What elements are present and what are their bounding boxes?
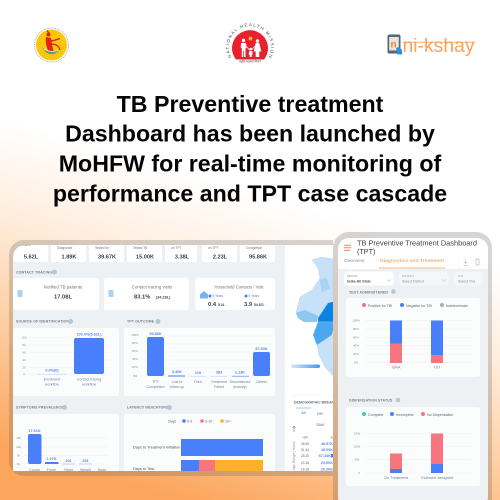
phone header: TB Preventive Treatment Dashboard [357, 238, 477, 248]
summary cards row: Enrolled [19, 243, 31, 247]
card: contact tracing visits: (34.28L) [156, 296, 171, 300]
panel: dispensation status chart: On Treatment [384, 475, 409, 480]
heading: source of identification: SOURCE OF IDENTIFICATION [16, 320, 70, 324]
panel: test administered chart: Positive for TBI [368, 304, 392, 308]
demographic breakdown: 14 [331, 436, 336, 440]
panel: TPT outcome chart: 1.13K [235, 370, 245, 374]
title: Dashboard has been launched by [65, 120, 435, 146]
panel: symptoms prevalence chart: 5k [17, 454, 21, 458]
summary cards row: 5.62L [24, 254, 39, 260]
filter: district [402, 275, 446, 282]
title [53, 91, 447, 206]
map regions [296, 257, 335, 375]
panel: test administered chart: 0% [354, 360, 358, 364]
logo: ni-kshay: n [390, 40, 397, 50]
card: household contacts per visit [195, 278, 275, 310]
panel: TPT outcome chart: 383 [216, 370, 222, 374]
panel: TPT outcome chart: follow-up [170, 385, 184, 389]
panel: symptoms prevalence chart: 251 [82, 459, 89, 463]
panel: symptoms prevalence chart: 0k [17, 462, 21, 466]
panel: TPT outcome chart: 95.86K [149, 332, 162, 336]
panel: latency indicators chart: Days to Treatment Initiation [133, 444, 180, 450]
panel: TPT outcome chart: 80% [132, 341, 138, 345]
filter: district: DISTRICT [402, 274, 414, 278]
panel: symptoms prevalence chart [13, 414, 119, 471]
demographic breakdown: 67.34K [319, 454, 331, 458]
panel: TPT outcome chart: Completion [146, 385, 165, 389]
panel: latency indicators chart: 3-10 [205, 420, 212, 424]
title: TB Preventive treatment [117, 91, 384, 117]
demographic breakdown: 20.00K [321, 461, 333, 465]
summary cards row: 15.00K [136, 254, 154, 260]
filter: region: REGION [347, 274, 357, 278]
card: notified TB patients: Notified TB patients [44, 284, 83, 290]
demographic breakdown: 45-60 [301, 442, 309, 446]
panel: source of identification chart: 100.0%(5.62L) [76, 332, 102, 336]
panel: symptoms prevalence chart: Cough [29, 468, 40, 472]
panel: latency indicators chart [124, 414, 275, 471]
panel: dispensation status chart: 0 [358, 471, 360, 475]
phone header [338, 238, 488, 269]
filter: tha: THA [458, 274, 463, 278]
panel: TPT outcome chart: Discontinued [230, 380, 250, 384]
panel: source of identification chart [13, 328, 119, 396]
panel: TPT outcome chart: Lost to [172, 380, 182, 384]
panel: TPT outcome chart: Treatment [211, 380, 227, 384]
demographic breakdown [291, 394, 333, 470]
panel: TPT outcome chart: 57.93K [255, 347, 268, 351]
panel: source of identification chart: Contact tracing [77, 378, 101, 382]
panel: symptoms prevalence chart: 10k [16, 445, 21, 449]
card: household contacts per visit: 5 Years [248, 294, 260, 298]
filter: tha [458, 275, 476, 282]
panel: dispensation status chart: Incomplete [396, 413, 414, 417]
panel: latency indicators chart: 10+ [225, 420, 231, 424]
laptop frame [9, 240, 333, 476]
panel: TPT outcome chart: 0% [133, 374, 137, 378]
panel: test administered chart: 60% [353, 336, 359, 340]
panel: source of identification chart: 40 [22, 358, 26, 362]
panel: TPT outcome chart [124, 328, 275, 396]
panel: source of identification chart: Enrolment [44, 378, 60, 382]
panel: dispensation status chart: 100k [354, 444, 361, 448]
phone header: (TPT) [357, 247, 375, 256]
demographic breakdown: HIV [317, 412, 324, 416]
panel: TPT outcome chart: (toxicity) [233, 385, 247, 389]
phone frame [333, 232, 492, 500]
card: household contacts per visit: 5 Years [212, 294, 224, 298]
filter: tha: Select Tha [458, 280, 475, 284]
summary cards row: 95.86K [249, 254, 267, 260]
demographic breakdown: 20.20K [321, 468, 333, 472]
panel: TPT outcome chart: Others [256, 380, 267, 384]
summary cards row: 3.38L [175, 254, 190, 260]
panel: source of identification chart: workflow [45, 382, 59, 386]
logo: national health mission: NATIONAL HEALTH MISSION [226, 23, 274, 58]
panel: test administered chart: IGRA [392, 366, 401, 370]
panel: source of identification chart: 0.0%(0) [45, 368, 59, 372]
panel: dispensation status chart: Complete [368, 413, 383, 417]
summary cards row: Diagnosed [57, 246, 72, 250]
panel: test administered chart: TST [434, 366, 441, 370]
panel: dispensation status chart: No Dispensation [427, 413, 453, 417]
logo: ni-kshay: ni-kshay [402, 36, 475, 57]
heading: TPT outcome: TPT OUTCOME [127, 320, 155, 324]
panel: symptoms prevalence chart: 201 [65, 459, 72, 463]
card: contact tracing visits: Contact tracing visits [132, 284, 173, 290]
panel: symptoms prevalence chart: 1.07K [46, 457, 57, 461]
panel: TPT outcome chart: 3.40K [172, 370, 182, 374]
title: MoHFW for real-time monitoring of [59, 150, 442, 176]
card: contact tracing visits: 83.1% [134, 294, 150, 300]
demographic breakdown: 25-30 [301, 454, 309, 458]
summary cards row: 1.89K [62, 254, 76, 260]
panel: test administered chart: 80% [353, 327, 359, 331]
heading: TPT outcome [127, 319, 160, 324]
heading: contact tracing: CONTACT TRACING [16, 270, 52, 274]
panel: source of identification chart: workflow [82, 382, 96, 386]
panel: test administered chart [346, 298, 480, 377]
demographic breakdown: 48.57K [321, 442, 333, 446]
panel: dispensation status chart [346, 407, 480, 486]
panel: TPT outcome chart: 119 [195, 371, 201, 375]
panel: test administered chart: 100% [352, 318, 360, 322]
panel: source of identification chart: 20 [22, 366, 26, 370]
logo: national health mission: राष्ट्रीय स्वास्थ्य मिशन [239, 60, 261, 64]
panel: test administered chart: Negative for TBI [406, 304, 432, 308]
demographic breakdown: 31-44 [301, 448, 309, 452]
summary cards row: Tested for [95, 246, 110, 250]
summary cards row: 39.67K [98, 254, 116, 260]
laptop dashboard screen [13, 245, 333, 471]
card: household contacts per visit: Household Contacts / Visit [214, 284, 264, 290]
panel: TPT outcome chart: 100% [131, 333, 139, 337]
heading: dispensation status: DISPENSATION STATUS [349, 398, 393, 402]
panel: TPT outcome chart: 20% [132, 365, 138, 369]
demographic breakdown: 22-28 [301, 461, 309, 465]
panel: source of identification chart: 0 [23, 372, 25, 376]
panel: TPT outcome chart: TPT [152, 380, 160, 384]
card: notified TB patients [13, 278, 99, 310]
summary cards row: 2.23L [213, 254, 228, 260]
heading: symptoms prevalence: SYMPTOMS PREVALENCE [16, 406, 64, 410]
heading: latency indicators: LATENCY INDICATORS [127, 406, 169, 410]
panel: latency indicators chart: Days [168, 420, 176, 424]
filter: region [344, 272, 394, 286]
filter: district: Select District [402, 280, 424, 284]
card: household contacts per visit: 54.87L [254, 303, 265, 307]
panel: symptoms prevalence chart: 15k [16, 436, 21, 440]
panel: test administered chart: Indeterminate [446, 304, 468, 308]
card: notified TB patients: 17.08L [54, 294, 72, 300]
demographic breakdown: DEMOGRAPHIC BREAKDOWN [294, 400, 346, 404]
heading: test administered: TEST ADMINISTERED [349, 290, 388, 294]
panel: dispensation status chart: Outcome Assigned [421, 475, 453, 480]
card: contact tracing visits [104, 278, 189, 310]
demographic breakdown: All [302, 411, 306, 415]
card: household contacts per visit: 5.2L [218, 303, 225, 307]
heading: test administered [349, 289, 396, 294]
demographic breakdown: SAM [316, 423, 324, 427]
demographic breakdown: Age Range (Years) [292, 441, 296, 470]
panel: dispensation status chart: 50k [355, 458, 360, 462]
panel: India map [285, 245, 333, 392]
summary cards row [13, 245, 275, 262]
phone header: Overview [344, 258, 365, 264]
demographic breakdown: 16-18 [301, 468, 309, 472]
demographic breakdown: 45.00K [321, 448, 333, 452]
panel: latency indicators chart: Days to Test [133, 466, 155, 471]
panel: latency indicators chart: 0-3 [187, 420, 192, 424]
card: household contacts per visit: 0.4 [208, 302, 217, 308]
panel: symptoms prevalence chart: Fever [47, 468, 57, 472]
card: household contacts per visit: 3.9 [244, 302, 253, 308]
panel: source of identification chart: 80 [22, 343, 26, 347]
logo: national tuberculosis programme [34, 28, 68, 62]
filter: region: India-All State [347, 280, 371, 284]
panel: symptoms prevalence chart: Weight [80, 468, 91, 472]
panel: symptoms prevalence chart: 17.61K [28, 429, 41, 433]
panel: test administered chart: 40% [353, 344, 359, 348]
summary cards row: Completion [246, 246, 262, 250]
demographic breakdown: >60 [302, 436, 308, 440]
phone dashboard screen [338, 238, 488, 500]
panel: TPT outcome chart: 60% [132, 349, 138, 353]
panel: source of identification chart: 100 [21, 336, 27, 340]
panel: TPT outcome chart: 40% [132, 357, 138, 361]
title: performance and TPT case cascade [53, 180, 447, 206]
panel: test administered chart: 20% [353, 352, 359, 356]
panel: TPT outcome chart: Failed [214, 385, 224, 389]
summary cards row: Tested TB [133, 246, 147, 250]
summary cards row: on TPT [208, 246, 218, 250]
panel: source of identification chart: 60 [22, 350, 26, 354]
map legend [291, 364, 320, 368]
panel: dispensation status chart: 150k [354, 432, 361, 436]
summary cards row: on TPT [171, 246, 181, 250]
phone header: Diagnostics and Treatment [380, 258, 444, 264]
panel: symptoms prevalence chart: None [98, 468, 106, 472]
panel: TPT outcome chart: Died [194, 380, 202, 384]
panel: symptoms prevalence chart: Night [64, 468, 73, 472]
